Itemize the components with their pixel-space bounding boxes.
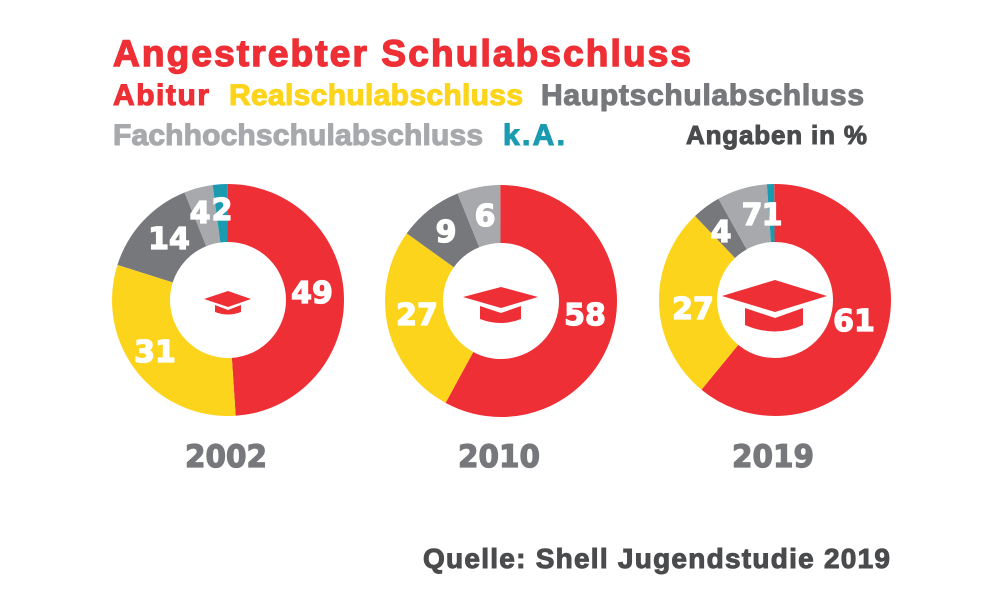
icon: graduation cap small (204, 291, 251, 314)
value 4: 4 (711, 215, 731, 250)
value 6: 6 (475, 199, 495, 234)
value 61: 61 (833, 304, 875, 339)
donut chart 2002 (134, 193, 333, 387)
value 31: 31 (134, 335, 176, 370)
value 1: 1 (762, 198, 782, 233)
value 58: 58 (564, 298, 606, 333)
unit note: Angaben in % (686, 120, 867, 150)
icon: graduation cap large (722, 280, 827, 332)
value 9: 9 (436, 215, 456, 250)
icon: graduation cap medium (463, 287, 538, 323)
value 49: 49 (291, 276, 333, 311)
year 2002: 2002 (185, 439, 267, 475)
donut chart 2010 (396, 199, 606, 388)
legend: Fachhochschulabschluss: Fachhochschulabschluss (113, 119, 483, 152)
value 7: 7 (742, 198, 762, 233)
legend (113, 79, 864, 152)
legend: Abitur: Abitur (113, 79, 209, 112)
year 2010: 2010 (458, 439, 540, 475)
donut chart 2019 (672, 198, 875, 387)
legend: Hauptschulabschluss: Hauptschulabschluss (541, 79, 864, 112)
source note: Quelle: Shell Jugendstudie 2019 (423, 543, 890, 574)
year 2019: 2019 (732, 439, 814, 475)
value 27: 27 (672, 292, 714, 327)
value 27: 27 (396, 298, 438, 333)
legend: k.A.: k.A. (503, 119, 565, 152)
title: Angestrebter Schulabschluss (113, 33, 691, 74)
value 4: 4 (190, 196, 210, 231)
legend: Realschulabschluss: Realschulabschluss (229, 79, 523, 112)
value 2: 2 (212, 193, 232, 228)
value 14: 14 (148, 222, 190, 257)
